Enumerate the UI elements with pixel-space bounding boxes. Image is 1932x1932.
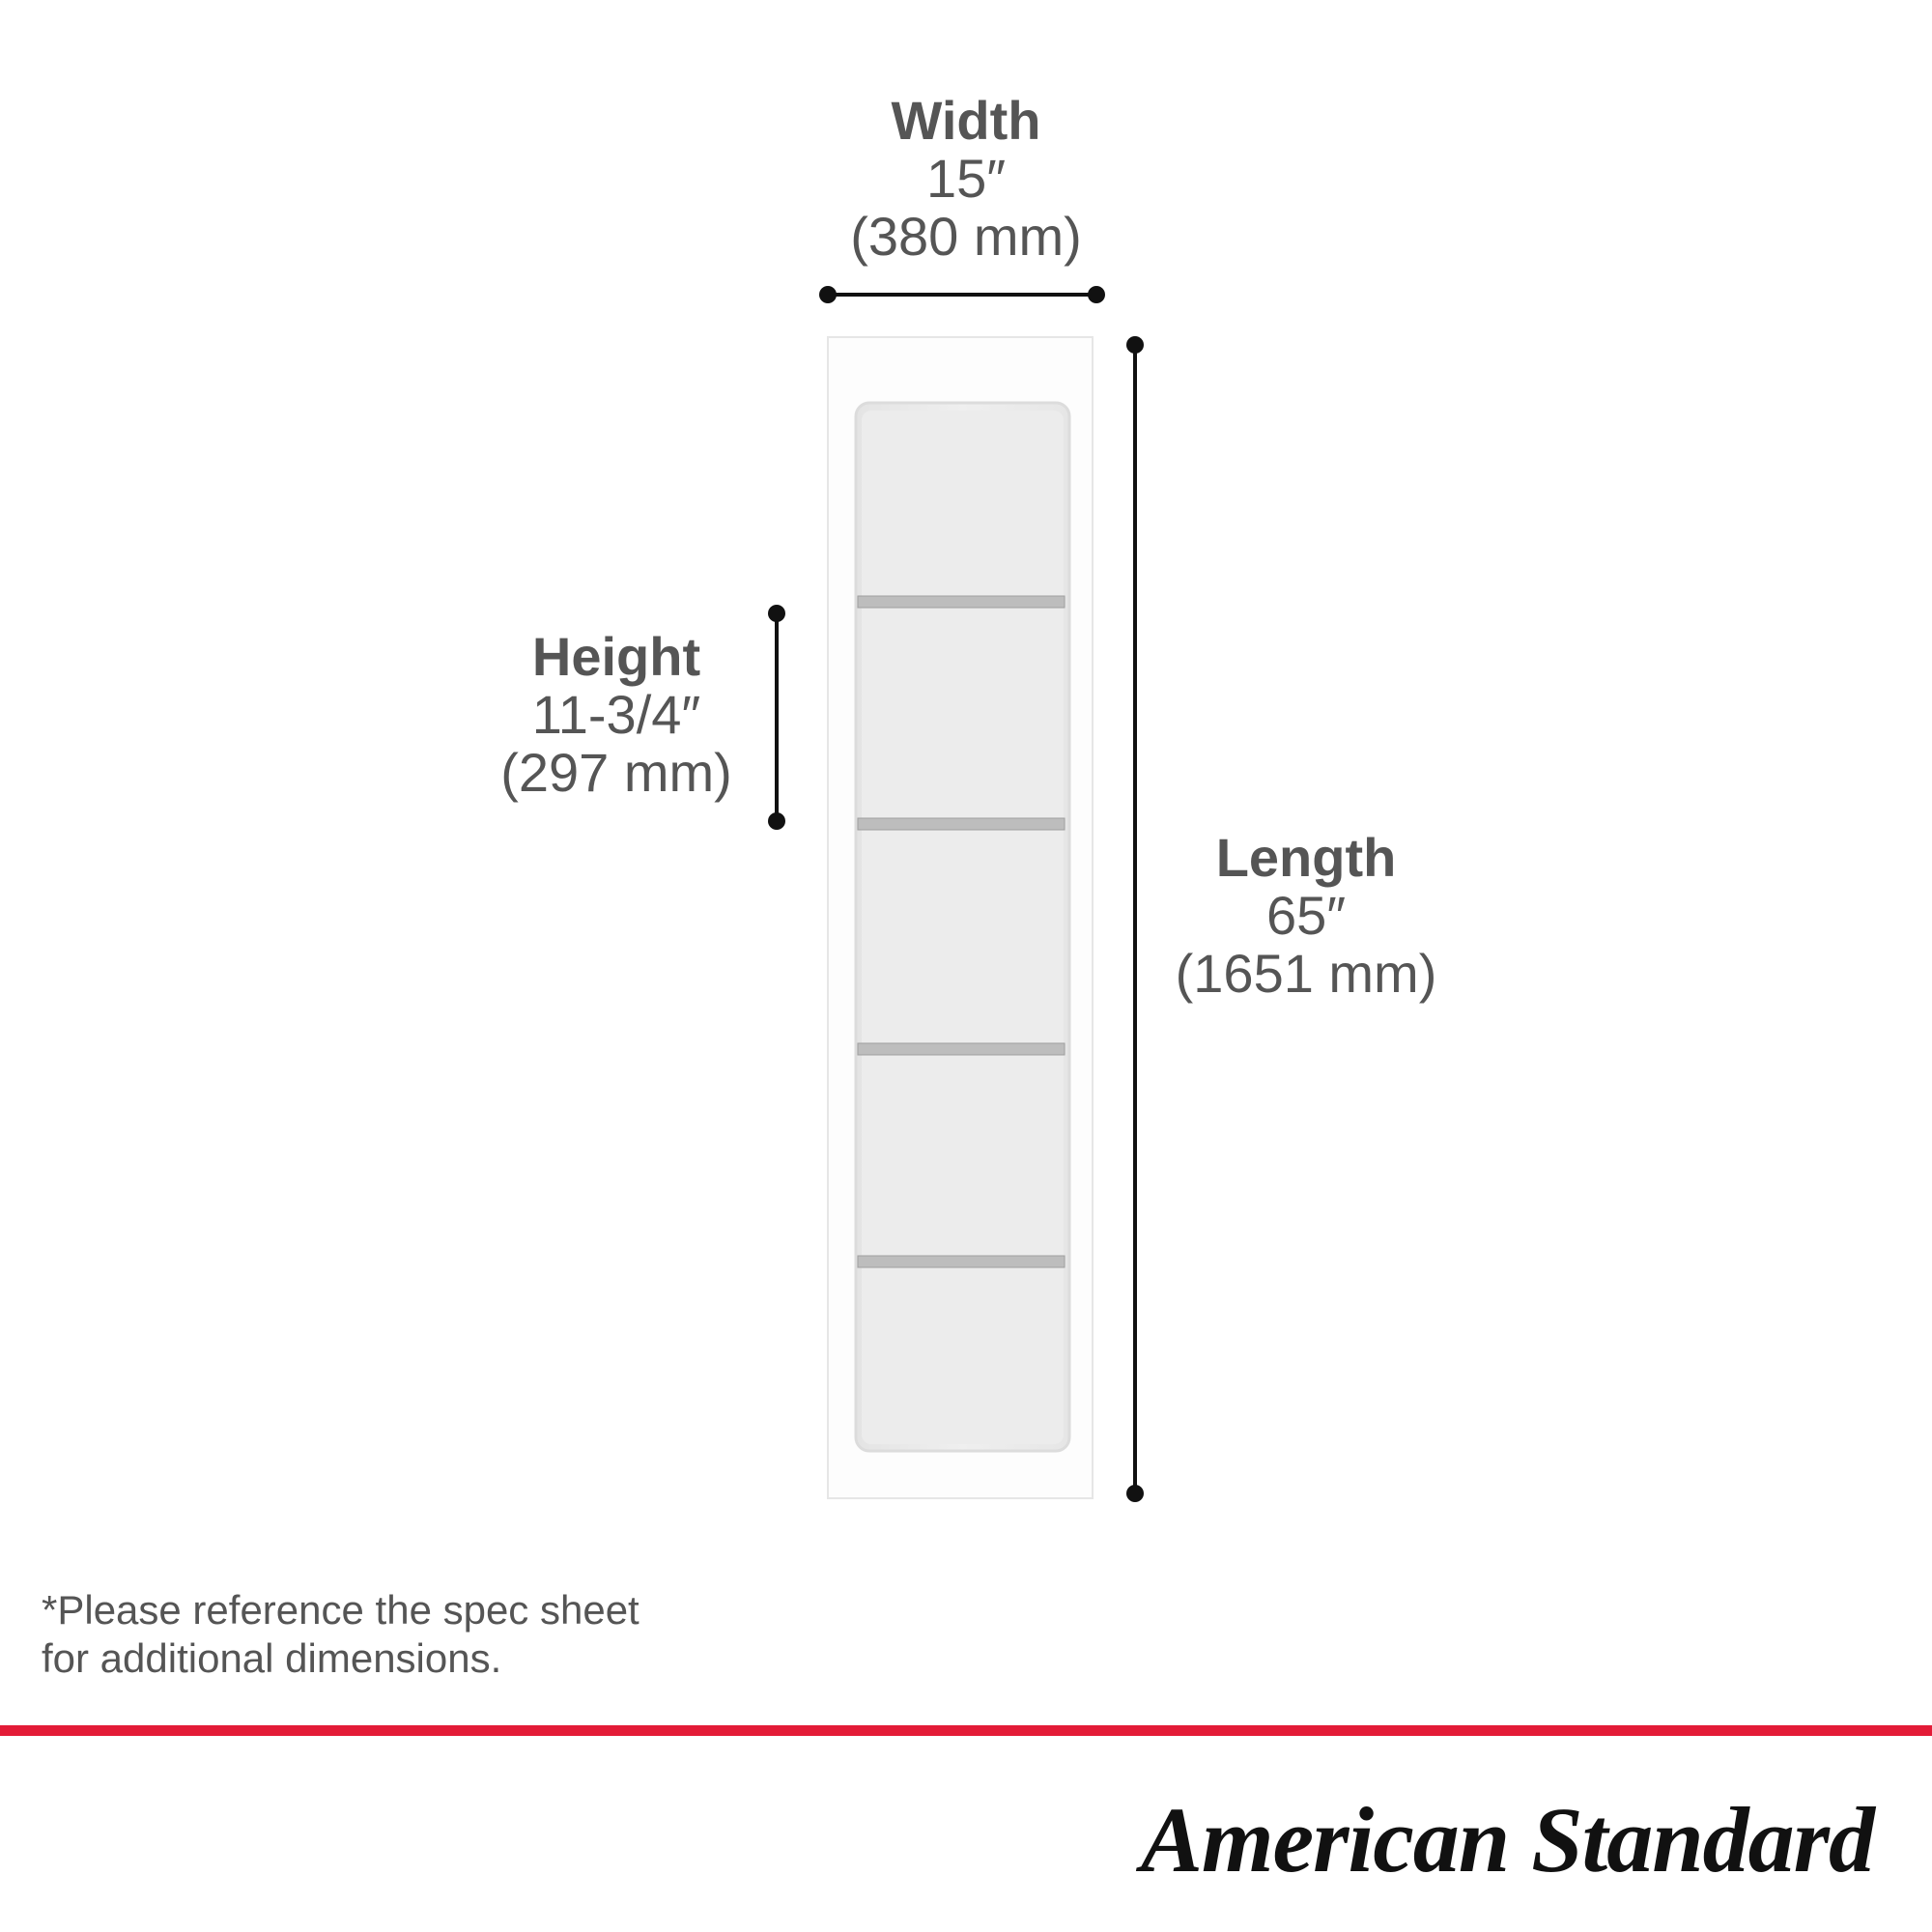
dimension line: height bbox=[768, 605, 785, 830]
label: height: Height bbox=[532, 626, 700, 687]
label: height bbox=[500, 626, 732, 803]
logo: American Standard: American Standard bbox=[1141, 1788, 1874, 1891]
dimension line: width bbox=[819, 286, 1105, 303]
label: width: (380 mm) bbox=[850, 206, 1082, 267]
label: width: Width bbox=[891, 90, 1040, 151]
dimension line: length bbox=[1126, 336, 1144, 1502]
label: width bbox=[850, 90, 1082, 267]
label: length: (1651 mm) bbox=[1176, 943, 1436, 1004]
red divider bbox=[0, 1725, 1932, 1736]
label: length: 65″ bbox=[1266, 885, 1346, 946]
footnote: for additional dimensions. bbox=[42, 1635, 501, 1681]
label: length bbox=[1176, 827, 1436, 1004]
label: length: Length bbox=[1216, 827, 1396, 888]
product: shelf unit bbox=[828, 337, 1093, 1498]
label: height: 11-3/4″ bbox=[532, 684, 700, 745]
footnote: *Please reference the spec sheet bbox=[42, 1587, 639, 1633]
label: height: (297 mm) bbox=[500, 742, 732, 803]
label: width: 15″ bbox=[926, 148, 1006, 209]
footnote bbox=[42, 1587, 639, 1681]
